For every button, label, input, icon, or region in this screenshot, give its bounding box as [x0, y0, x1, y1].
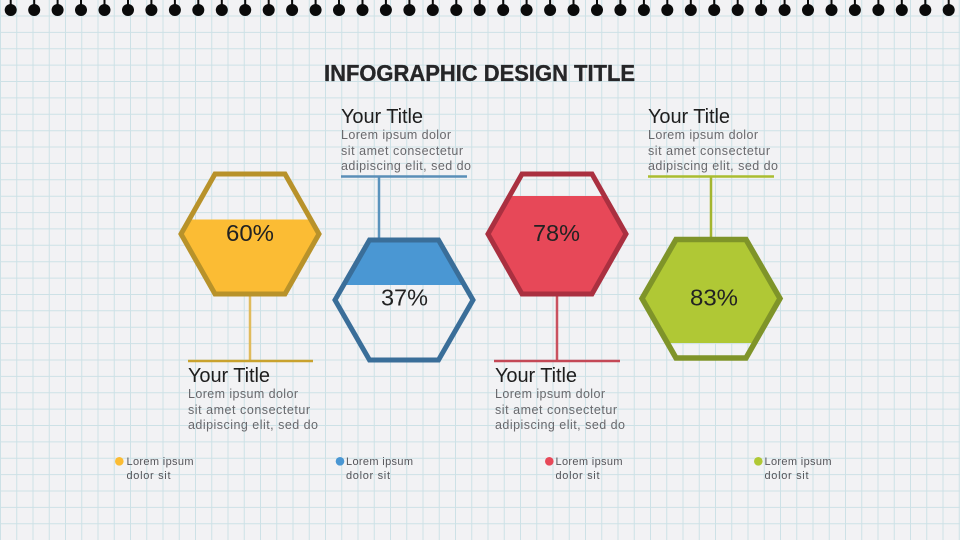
- text block: green: adipiscing elit, sed do: [648, 159, 778, 173]
- panel: blue 37%: [335, 106, 473, 360]
- text block: blue: [341, 106, 471, 173]
- text block: blue: adipiscing elit, sed do: [341, 159, 471, 173]
- legend: red: Lorem ipsum: [556, 456, 622, 468]
- connector: red: [494, 296, 620, 361]
- legend: blue: [336, 456, 413, 482]
- hexagon gauge: red: [488, 174, 626, 294]
- title: INFOGRAPHIC DESIGN TITLE: [324, 60, 635, 86]
- legend: yellow: dolor sit: [126, 470, 170, 482]
- value: 78%: 78%: [533, 220, 580, 246]
- connector: green: [648, 176, 774, 238]
- text block: yellow: adipiscing elit, sed do: [188, 418, 318, 432]
- text block: blue: sit amet consectetur: [341, 144, 463, 158]
- hexagon gauge: yellow: [181, 174, 319, 294]
- legend: blue: dolor sit: [346, 470, 390, 482]
- legend: green: dolor sit: [764, 470, 808, 482]
- text block: blue: Your Title: [341, 106, 423, 128]
- text block: red: sit amet consectetur: [495, 403, 617, 417]
- legend: green: [754, 456, 832, 482]
- text block: red: Lorem ipsum dolor: [495, 387, 605, 401]
- hexagon gauge: blue: [335, 240, 473, 360]
- legend: yellow: [115, 456, 194, 482]
- value: 60%: 60%: [226, 220, 274, 246]
- text block: red: adipiscing elit, sed do: [495, 418, 625, 432]
- value: 83%: 83%: [690, 284, 738, 310]
- panel: red 78%: [488, 174, 626, 432]
- text block: yellow: Lorem ipsum dolor: [188, 387, 298, 401]
- panel: green 83%: [642, 106, 780, 358]
- connector: blue: [341, 176, 467, 240]
- text block: yellow: Your Title: [188, 365, 270, 387]
- text block: green: sit amet consectetur: [648, 144, 770, 158]
- text block: green: Your Title: [648, 106, 730, 128]
- legend: green: Lorem ipsum: [764, 456, 832, 468]
- legend: red: dolor sit: [556, 470, 600, 482]
- legend: yellow: Lorem ipsum: [126, 456, 194, 468]
- connector: yellow: [188, 296, 313, 361]
- text block: red: Your Title: [495, 365, 577, 387]
- text block: green: Lorem ipsum dolor: [648, 128, 758, 142]
- panel: yellow 60%: [181, 174, 319, 432]
- value: 37%: 37%: [381, 284, 428, 310]
- text block: green: [648, 106, 778, 173]
- spiral binding dots: [5, 0, 955, 16]
- legend: red: [545, 456, 622, 482]
- legend: blue: Lorem ipsum: [346, 456, 413, 468]
- text block: yellow: sit amet consectetur: [188, 403, 310, 417]
- text block: blue: Lorem ipsum dolor: [341, 128, 451, 142]
- text block: yellow: [188, 365, 318, 432]
- hexagon gauge: green: [642, 240, 780, 358]
- text block: red: [495, 365, 625, 432]
